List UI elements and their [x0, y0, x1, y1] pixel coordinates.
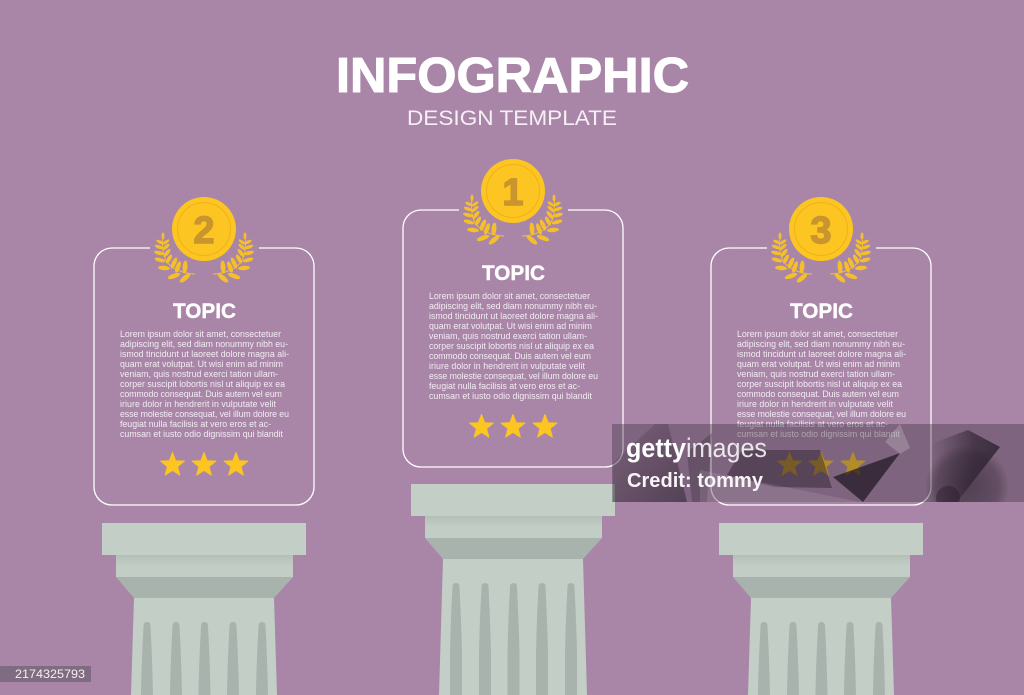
heading: topic: TOPIC [173, 300, 236, 323]
text block: veniam, quis nostrud exerci tation ullam- [120, 369, 278, 379]
watermark band [612, 424, 1024, 502]
text block: commodo consequat. Duis autem vel eum [120, 389, 282, 399]
text block: cumsan et iusto odio dignissim qui blandit [429, 391, 593, 401]
subtitle: DESIGN TEMPLATE [407, 107, 617, 130]
text block: commodo consequat. Duis autem vel eum [429, 351, 591, 361]
icon: medal 2 [154, 197, 254, 284]
watermark logo text: gettyimages [626, 433, 767, 463]
text block: Lorem ipsum dolor sit amet, consectetuer [120, 329, 281, 339]
text block [737, 329, 906, 439]
icon: medal 2: 2 [193, 210, 215, 252]
text block: ismod tincidunt ut laoreet dolore magna ali- [120, 349, 289, 359]
column: first place [411, 484, 615, 695]
text block: corper suscipit lobortis nisl ut aliquip ex ea [429, 341, 594, 351]
text block: adipiscing elit, sed diam nonummy nibh eu- [429, 301, 597, 311]
text block: ismod tincidunt ut laoreet dolore magna ali- [429, 311, 598, 321]
text block: commodo consequat. Duis autem vel eum [737, 389, 899, 399]
panel: third place card [711, 197, 931, 505]
column: third place [719, 523, 923, 695]
text block: corper suscipit lobortis nisl ut aliquip ex ea [737, 379, 902, 389]
panel: first place card [403, 159, 623, 467]
text block: iriure dolor in hendrerit in vulputate velit [120, 399, 277, 409]
text block: quam erat volutpat. Ut wisi enim ad minim [737, 359, 900, 369]
text block: iriure dolor in hendrerit in vulputate velit [429, 361, 586, 371]
column: second place [102, 523, 306, 695]
text block: cumsan et iusto odio dignissim qui blandit [120, 429, 284, 439]
text block: quam erat volutpat. Ut wisi enim ad minim [429, 321, 592, 331]
text block: feugiat nulla facilisis at vero eros et ac- [429, 381, 580, 391]
text block: Lorem ipsum dolor sit amet, consectetuer [429, 291, 590, 301]
text block: feugiat nulla facilisis at vero eros et ac- [120, 419, 271, 429]
text block: adipiscing elit, sed diam nonummy nibh eu- [120, 339, 288, 349]
watermark credit text: Credit: tommy [627, 470, 764, 492]
text block: ismod tincidunt ut laoreet dolore magna ali- [737, 349, 906, 359]
title: INFOGRAPHIC [336, 49, 689, 103]
text block: esse molestie consequat, vel illum dolore eu [120, 409, 289, 419]
text block [120, 329, 289, 439]
rating stars [470, 414, 557, 437]
text block: esse molestie consequat, vel illum dolore eu [429, 371, 598, 381]
image id tag [0, 666, 91, 682]
icon: medal 1 [463, 159, 563, 246]
text block: cumsan et iusto odio dignissim qui blandit [737, 429, 901, 439]
text block: adipiscing elit, sed diam nonummy nibh eu- [737, 339, 905, 349]
text block: esse molestie consequat, vel illum dolore eu [737, 409, 906, 419]
heading: topic: TOPIC [482, 262, 545, 285]
image id tag: 2174325793 [15, 667, 85, 681]
icon: medal 3: 3 [810, 210, 832, 252]
text block [429, 291, 598, 401]
rating stars [161, 452, 248, 475]
icon: medal 1: 1 [502, 172, 524, 214]
text block: veniam, quis nostrud exerci tation ullam- [737, 369, 895, 379]
heading: topic: TOPIC [790, 300, 853, 323]
text block: veniam, quis nostrud exerci tation ullam- [429, 331, 587, 341]
text block: feugiat nulla facilisis at vero eros et ac- [737, 419, 888, 429]
icon: medal 3 [771, 197, 871, 284]
text block: Lorem ipsum dolor sit amet, consectetuer [737, 329, 898, 339]
text block: iriure dolor in hendrerit in vulputate velit [737, 399, 894, 409]
rating stars [778, 452, 865, 475]
panel: second place card [94, 197, 314, 505]
text block: quam erat volutpat. Ut wisi enim ad minim [120, 359, 283, 369]
text block: corper suscipit lobortis nisl ut aliquip ex ea [120, 379, 285, 389]
